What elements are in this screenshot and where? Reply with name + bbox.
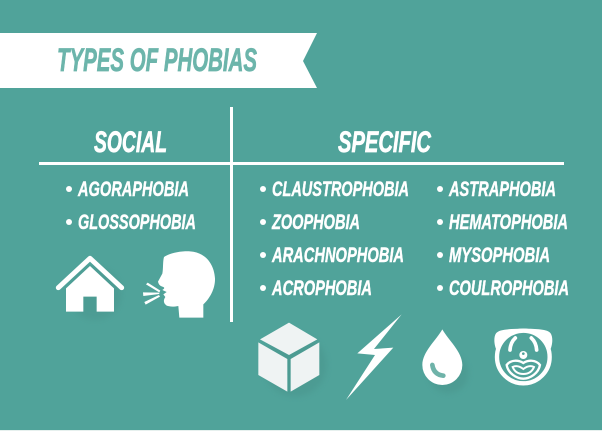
title: TYPES OF PHOBIAS — [57, 42, 257, 78]
list: specific phobias column 2: MYSOPHOBIA — [449, 244, 550, 267]
icon: house — [58, 258, 122, 320]
table dividers — [39, 107, 564, 322]
icon: lightning bolt — [346, 314, 402, 400]
heading: specific: SPECIFIC — [338, 126, 432, 159]
list: specific phobias column 1: CLAUSTROPHOBIA — [272, 178, 409, 201]
icon: clown face — [494, 329, 552, 383]
icon: cube — [258, 323, 327, 397]
icon: speaking head — [158, 251, 215, 318]
list: specific phobias column 2: ASTRAPHOBIA — [448, 178, 556, 201]
icon: speech lines — [143, 283, 160, 305]
list: specific phobias column 2 — [437, 178, 569, 300]
list: specific phobias column 1: ARACHNOPHOBIA — [271, 244, 404, 267]
list: specific phobias column 1: ZOOPHOBIA — [271, 211, 360, 234]
title banner — [0, 33, 317, 88]
list: social phobias — [66, 178, 196, 234]
list: specific phobias column 1: ACROPHOBIA — [271, 277, 372, 300]
list: social phobias: GLOSSOPHOBIA — [78, 211, 196, 234]
list: social phobias: AGORAPHOBIA — [77, 178, 189, 201]
heading: social: SOCIAL — [94, 126, 167, 159]
icon: water drop — [422, 329, 468, 393]
list: specific phobias column 1 — [260, 178, 409, 300]
